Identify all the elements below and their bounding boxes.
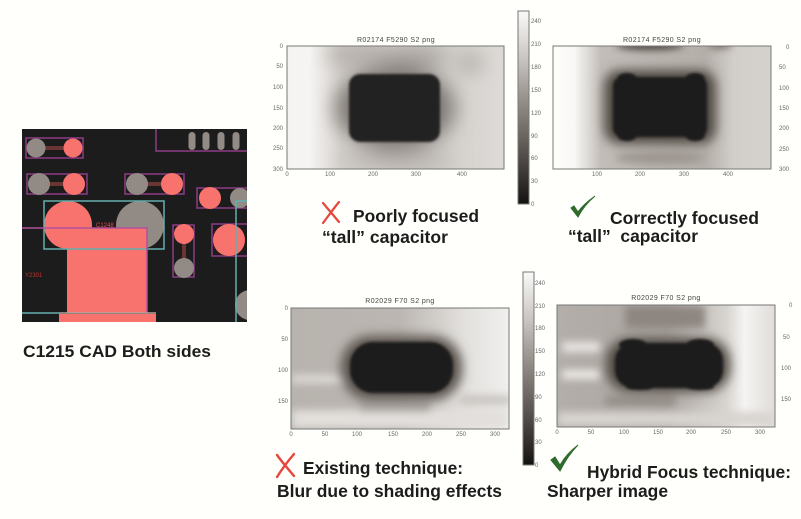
caption: correctly focused [568, 196, 759, 246]
chart: colour bar top [518, 11, 542, 208]
axis ticks: 100 [325, 172, 336, 178]
chart: colour bar top: 120 [531, 111, 542, 117]
axis ticks: 400 [457, 172, 468, 178]
axis ticks [273, 44, 468, 178]
axis ticks [278, 306, 501, 438]
CAD: reference labels: C1248 [96, 223, 114, 229]
chart: colour bar top: 240 [531, 19, 542, 25]
CAD: outline traces [22, 201, 247, 322]
axis ticks: 300 [755, 430, 766, 436]
CAD: right round pad [211, 223, 247, 257]
title: R02029 F70 S2 png [631, 295, 701, 302]
axis ticks: 100 [352, 432, 363, 438]
chart: colour bar bottom: 90 [535, 395, 542, 401]
axis ticks: 100 [592, 172, 603, 178]
axis ticks: 250 [456, 432, 467, 438]
icon: green check [551, 445, 578, 471]
text: correctly focused: “tall” capacitor [568, 226, 698, 246]
axis ticks: 50 [322, 432, 329, 438]
axis ticks: 300 [411, 172, 422, 178]
CAD: bottom pad [59, 314, 156, 322]
axis ticks: 100 [278, 368, 289, 374]
text: poorly focused: Poorly focused [353, 206, 479, 226]
axis ticks: 300 [273, 167, 284, 173]
chart: correctly focused image [553, 37, 790, 178]
axis ticks: 0 [789, 303, 793, 309]
axis ticks: 100 [273, 85, 284, 91]
CAD: reference labels: Y2301 [25, 273, 43, 279]
axis ticks: 150 [779, 106, 790, 112]
axis ticks: 0 [280, 44, 284, 50]
axis ticks: 300 [679, 172, 690, 178]
CAD: small component second row left [27, 173, 87, 195]
axis ticks: 150 [273, 106, 284, 112]
chart: colour bar top: 210 [531, 42, 542, 48]
axis ticks: 200 [686, 430, 697, 436]
axis ticks: 150 [781, 397, 792, 403]
caption: hybrid focus technique [547, 445, 791, 501]
axis ticks [592, 45, 790, 178]
text: hybrid focus: Sharper image [547, 481, 668, 501]
chart: colour bar top: 0 [531, 202, 535, 208]
axis ticks: 50 [281, 337, 289, 343]
chart: colour bar bottom: 210 [535, 304, 546, 310]
text: existing technique: Blur due to shading effects [277, 481, 502, 501]
icon: green check [571, 196, 595, 217]
axis ticks: 0 [285, 306, 289, 312]
axis ticks: 50 [276, 64, 284, 70]
axis ticks: 200 [368, 172, 379, 178]
text: correctly focused [568, 208, 759, 246]
title: R02029 F70 S2 png [365, 298, 435, 305]
axis ticks [555, 303, 793, 436]
axis ticks: 250 [273, 146, 284, 152]
chart: colour bar bottom: 180 [535, 326, 546, 332]
axis ticks: 0 [555, 430, 559, 436]
chart: colour bar bottom: 60 [535, 418, 542, 424]
chart: colour bar bottom: 150 [535, 349, 546, 355]
CAD: vertical component [173, 224, 194, 278]
caption: poorly focused [322, 202, 479, 247]
axis ticks: 300 [779, 167, 790, 173]
axis ticks: 200 [422, 432, 433, 438]
axis ticks: 50 [588, 430, 595, 436]
chart: colour bar bottom: 0 [535, 463, 539, 469]
text: poorly focused: “tall” capacitor [322, 227, 448, 247]
caption: existing technique [277, 454, 502, 501]
CAD: small component top row [26, 138, 83, 158]
chart: hybrid focus image [555, 295, 793, 436]
axis ticks: 50 [779, 65, 786, 71]
axis ticks: 150 [388, 432, 399, 438]
title: R02174 F5290 S2 png [357, 37, 435, 44]
axis ticks: 200 [779, 126, 790, 132]
chart: colour bar bottom: 240 [535, 281, 546, 287]
axis ticks: 200 [635, 172, 646, 178]
axis ticks: 50 [783, 335, 790, 341]
axis ticks: 150 [278, 399, 289, 405]
CAD: grey pad bottom right [235, 290, 247, 320]
chart: colour bar top: 90 [531, 134, 538, 140]
title: R02174 F5290 S2 png [623, 37, 701, 44]
panel: CAD layout of C1215 [22, 125, 265, 322]
CAD: connector pads top right [155, 129, 247, 152]
text: existing technique: Existing technique: [303, 458, 463, 478]
icon: red cross [277, 454, 294, 477]
CAD: large capacitor pads [44, 201, 164, 313]
CAD: reference labels [25, 223, 114, 279]
chart: colour bar top: 150 [531, 88, 542, 94]
chart: colour bar bottom [523, 272, 546, 469]
axis ticks: 250 [779, 147, 790, 153]
CAD: small component right [196, 187, 247, 209]
text: correctly focused: Correctly focused [610, 208, 759, 228]
chart: colour bar bottom: 30 [535, 440, 542, 446]
text: poorly focused [322, 206, 479, 247]
axis ticks: 200 [273, 126, 284, 132]
icon: red cross [323, 202, 339, 223]
axis ticks: 100 [619, 430, 630, 436]
axis ticks: 100 [779, 86, 790, 92]
chart: colour bar top: 60 [531, 156, 538, 162]
axis ticks: 0 [285, 172, 289, 178]
text: existing technique [277, 458, 502, 501]
axis ticks: 300 [490, 432, 501, 438]
chart: existing technique image [278, 298, 510, 438]
chart: colour bar top: 30 [531, 179, 538, 185]
heading: CAD caption: C1215 CAD Both sides [23, 343, 211, 361]
text: hybrid focus: Hybrid Focus technique: [587, 462, 791, 482]
axis ticks: 250 [721, 430, 732, 436]
axis ticks: 400 [723, 172, 734, 178]
axis ticks: 0 [786, 45, 790, 51]
CAD: small component second row middle [125, 173, 184, 195]
text: hybrid focus [547, 462, 791, 501]
chart: colour bar top: 180 [531, 65, 542, 71]
chart: poorly focused image [273, 37, 504, 178]
axis ticks: 100 [781, 366, 792, 372]
axis ticks: 0 [289, 432, 293, 438]
chart: colour bar bottom: 120 [535, 372, 546, 378]
axis ticks: 150 [653, 430, 664, 436]
